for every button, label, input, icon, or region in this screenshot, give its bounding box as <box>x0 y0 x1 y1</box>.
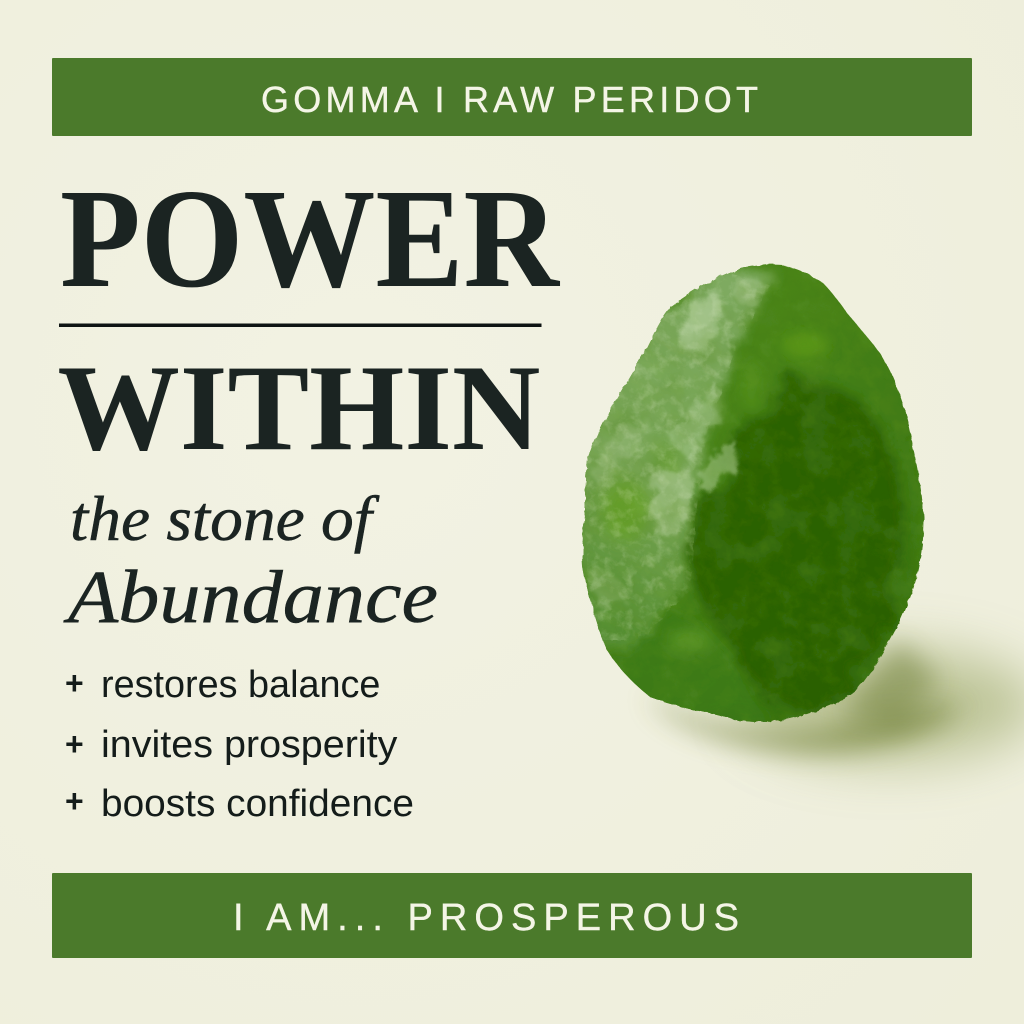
right rim tone <box>850 430 924 693</box>
title: POWER: POWER <box>60 160 561 317</box>
bottom rim tone <box>700 640 900 740</box>
subtitle: the stone of <box>70 483 380 554</box>
top banner <box>52 58 972 136</box>
top banner: GOMMA I RAW PERIDOT <box>261 79 758 120</box>
stone shadow <box>645 640 1024 763</box>
benefit: restores balance: + <box>65 665 84 701</box>
yellow-green patch <box>601 480 649 540</box>
icon: raw peridot stone <box>582 264 924 722</box>
benefits list <box>65 664 414 825</box>
benefit: invites prosperity: invites prosperity <box>101 724 398 766</box>
pale highlights <box>590 275 765 610</box>
lower left darker face <box>605 619 770 730</box>
benefit: restores balance: restores balance <box>101 664 380 706</box>
bright upper facet spots <box>781 331 829 359</box>
pale left face <box>575 265 775 650</box>
benefit: boosts confidence: + <box>65 783 84 819</box>
subtitle <box>63 483 438 639</box>
subtitle: Abundance <box>63 556 438 639</box>
benefit: boosts confidence: boosts confidence <box>101 782 414 825</box>
title: WITHIN: WITHIN <box>58 340 540 476</box>
benefit: invites prosperity: + <box>65 726 84 762</box>
dark central facet <box>690 375 905 715</box>
bottom banner: I AM... PROSPEROUS <box>233 897 739 939</box>
bottom banner <box>52 873 972 958</box>
stone texture <box>588 272 923 722</box>
title divider <box>59 324 542 327</box>
